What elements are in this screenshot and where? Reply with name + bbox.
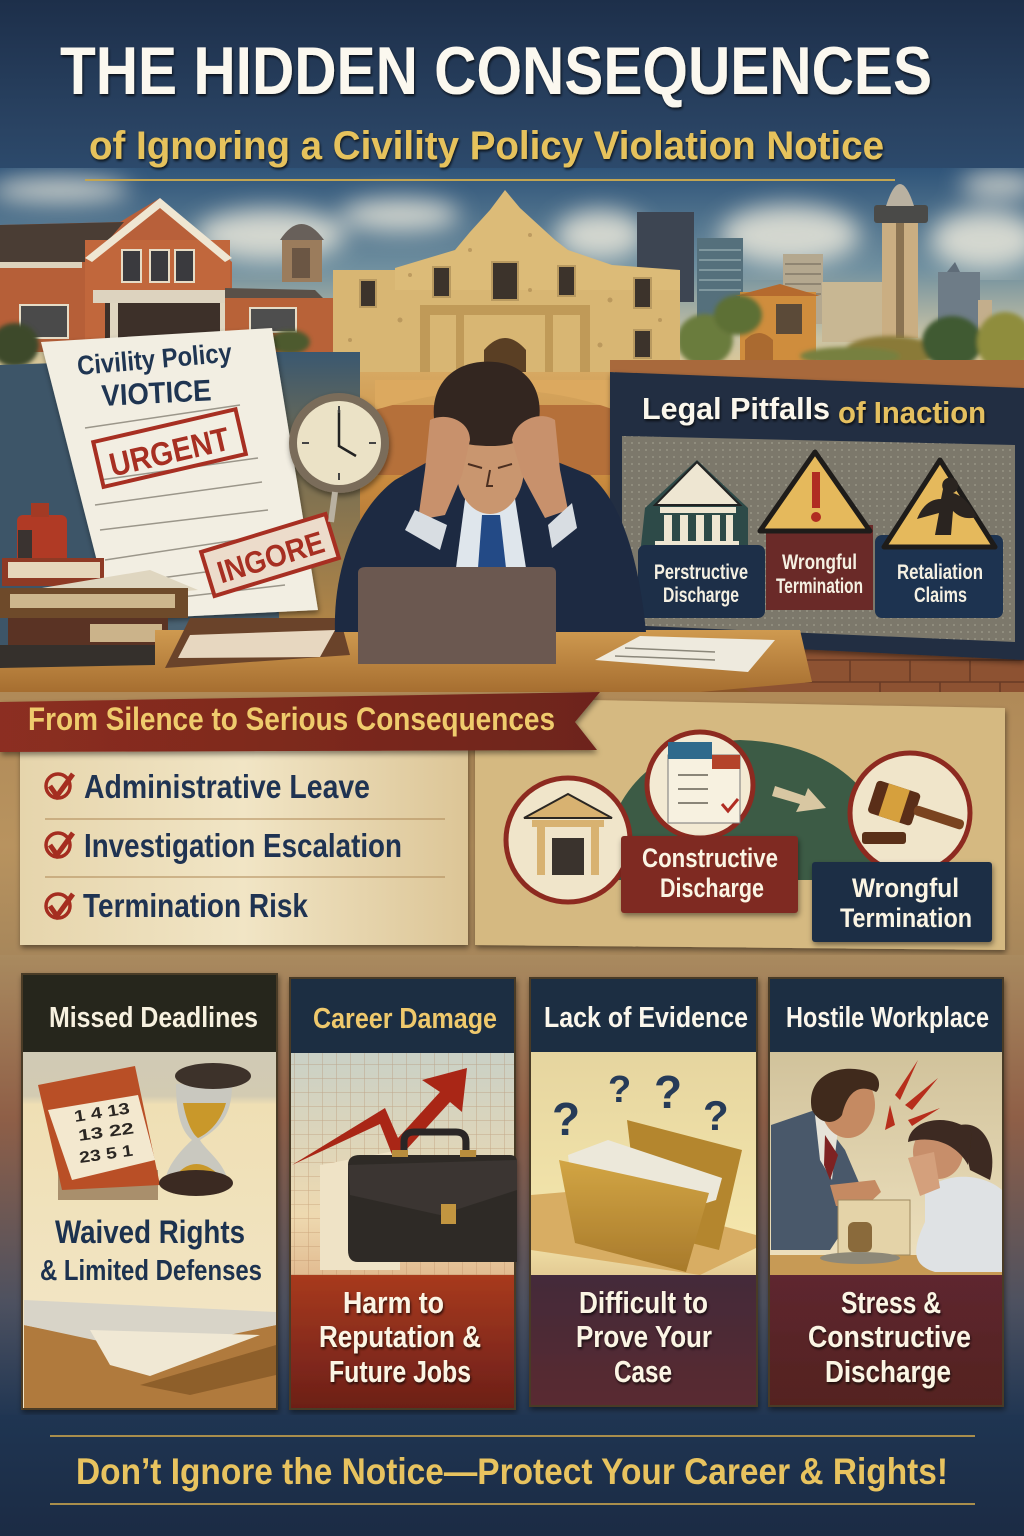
text: waived rights: & Limited Defenses: [40, 1255, 262, 1287]
scene: office backdrop: [0, 352, 1024, 715]
red panel: Harm to: [343, 1285, 444, 1320]
label: perstructive discharge: Perstructive: [654, 561, 748, 584]
object: desk certificate: [820, 1200, 910, 1264]
heading: legal pitfalls: Legal Pitfalls: [642, 391, 830, 426]
background: lower gradient: [0, 955, 1024, 1420]
arrow: [772, 786, 826, 812]
figure: upset woman: [908, 1120, 1002, 1272]
scene: skyline background: [0, 168, 1024, 382]
label: perstructive discharge: Discharge: [663, 584, 739, 607]
wine panel: Stress &: [841, 1285, 941, 1320]
ribbon heading: From Silence to Serious Consequences: [28, 701, 555, 737]
icon: calendar: 23 5 1: [78, 1143, 134, 1167]
stack of books and stapler: [0, 503, 198, 669]
building: Alamo facade: [333, 190, 680, 382]
red panel: [291, 1275, 514, 1408]
red rising arrow: [292, 1068, 467, 1165]
red panel: Future Jobs: [329, 1354, 471, 1389]
building: observation tower: [874, 184, 928, 338]
text: waived rights: Waived Rights: [55, 1214, 245, 1250]
label: wrongful termination: [812, 862, 992, 942]
heading: legal pitfalls: [642, 391, 986, 430]
notice heading: [76, 338, 233, 413]
building: distant towers: [637, 212, 992, 342]
plum panel: Prove Your: [576, 1319, 712, 1354]
papers and desk edge: [24, 1300, 276, 1408]
icon: retaliation triangle: [884, 460, 995, 547]
hair: [434, 362, 540, 446]
stressed man at laptop: [335, 362, 646, 664]
icon: checklist circle: [647, 732, 753, 838]
card heading: Missed Deadlines: [49, 1002, 258, 1034]
plum panel: [531, 1275, 756, 1405]
item: termination risk: Termination Risk: [83, 887, 309, 924]
panel: checklist: [20, 748, 468, 945]
icon: courthouse circle: [506, 778, 630, 902]
label: constructive discharge: Constructive: [642, 843, 778, 873]
label: wrongful termination: Wrongful: [782, 551, 857, 574]
icon: warning triangle: [760, 452, 870, 531]
icon: folder: [559, 1120, 742, 1272]
wine panel: Constructive: [808, 1319, 971, 1354]
card heading: Lack of Evidence: [544, 1002, 748, 1034]
question marks: ?: [654, 1066, 682, 1118]
wine panel: Discharge: [825, 1354, 951, 1389]
subtitle: of Ignoring a Civility Policy Violation Notice: [89, 124, 884, 168]
suit: [335, 455, 646, 632]
shirt cuffs: [405, 503, 577, 550]
card heading: Career Damage: [313, 1003, 497, 1035]
red shout marks: [885, 1060, 940, 1130]
notice heading: Civility Policy: [76, 338, 233, 381]
icon: calendar: [38, 1066, 160, 1200]
label: retaliation claims: Claims: [914, 584, 967, 607]
desk: [770, 1255, 1002, 1275]
label: retaliation claims: Retaliation: [897, 561, 983, 584]
envelope behind briefcase: [320, 1150, 400, 1270]
card: hostile workplace: [769, 978, 1003, 1406]
wall clock: [289, 393, 389, 522]
face: [456, 422, 524, 514]
label: wrongful termination: [766, 525, 873, 610]
label: constructive discharge: Discharge: [660, 873, 764, 903]
ribbon heading: [0, 692, 600, 752]
question marks: ?: [608, 1069, 631, 1111]
card: career damage: [290, 978, 517, 1409]
footer call to action: Don’t Ignore the Notice—Protect Your Career & Rights!: [76, 1451, 948, 1492]
panel: consequences map: [475, 700, 1005, 950]
plum panel: Case: [614, 1354, 672, 1389]
icon: calendar: 1 4 13: [73, 1100, 131, 1126]
item: investigation escalation: Investigation Escalation: [84, 827, 402, 864]
label: wrongful termination: Termination: [840, 903, 972, 933]
notice document: [41, 328, 339, 620]
trees: [0, 295, 1024, 372]
card: lack of evidence: [530, 978, 757, 1406]
stamp: ignore: INGORE: [213, 525, 328, 590]
background: tan consequences band: [0, 692, 1024, 972]
desk: [0, 618, 812, 692]
notice heading: VIOTICE: [101, 374, 212, 413]
question marks: ?: [703, 1092, 729, 1139]
building: brick school: [0, 198, 333, 352]
label: constructive discharge: [621, 836, 798, 913]
label: wrongful termination: Termination: [776, 575, 863, 598]
background: navy header band: [0, 0, 1024, 190]
wooden desk: [531, 1190, 756, 1275]
item: administrative leave: Administrative Leave: [84, 768, 370, 805]
desk folder and papers: [165, 618, 775, 672]
label: retaliation claims: [875, 535, 1003, 618]
wine panel: [770, 1275, 1002, 1405]
icon: hourglass: [159, 1063, 251, 1196]
plum panel: Difficult to: [579, 1285, 708, 1320]
question marks: ?: [552, 1093, 580, 1145]
building: orange mission house: [735, 284, 820, 364]
card: missed deadlines: [22, 974, 277, 1409]
question marks: [552, 1066, 729, 1145]
arms and hands: [418, 416, 568, 520]
label: wrongful termination: Wrongful: [852, 873, 959, 903]
icon: gavel circle: [850, 753, 970, 873]
label: perstructive discharge: [638, 545, 765, 618]
icon: courthouse: [640, 460, 748, 555]
laptop: [358, 567, 556, 664]
icon: calendar: 13 22: [77, 1120, 135, 1145]
text: waived rights: [40, 1214, 262, 1287]
heading: legal pitfalls: of Inaction: [838, 395, 986, 430]
red panel: Reputation &: [319, 1319, 481, 1354]
icon: briefcase: [348, 1132, 517, 1262]
figure: angry man: [771, 1069, 881, 1250]
stamp: urgent: URGENT: [106, 420, 233, 483]
panel: legal pitfalls: [610, 372, 1024, 660]
footer band: [0, 1415, 1024, 1536]
